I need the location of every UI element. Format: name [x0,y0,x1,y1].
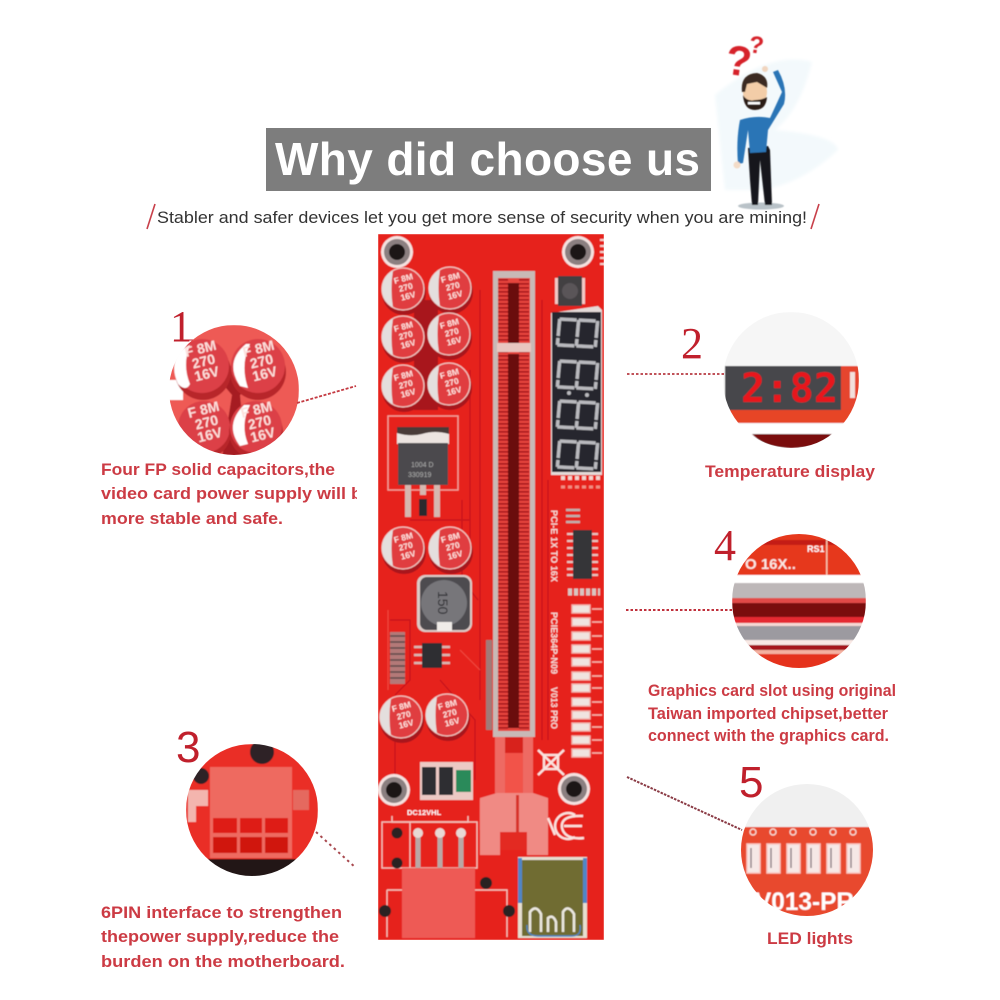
detail circle 1: F 8M [239,398,274,421]
capacitors: F 8M [439,316,460,331]
description 4 [648,682,896,745]
detail circle 4: RS1 [807,544,825,554]
description 3: 6PIN interface to strengthen [101,904,342,922]
capacitors [380,267,473,743]
number 4: 4 [714,521,736,570]
capacitors: 16V [399,386,417,400]
detail circle 2 [723,312,859,448]
capacitors: 270 [441,707,458,720]
detail circle 1: 270 [248,350,275,372]
detail circle 1: F 8M [186,398,221,421]
capacitors: F 8M [391,699,412,714]
illustration: confused man [723,31,785,210]
connector line 4 [626,609,733,611]
capacitors: 16V [399,548,417,562]
detail circle 2: 2:82 [741,366,838,412]
callout 5: LED lights [627,758,874,948]
detail circle 1: 270 [246,411,273,433]
14-pin chip [561,478,602,592]
description 4: Taiwan imported chipset,better [648,705,889,723]
capacitors: 16V [446,288,464,302]
callout 4: graphics card slot [626,521,896,745]
detail circle 5 [740,782,874,919]
capacitors: 16V [446,548,464,562]
silkscreen labels: PCIE364P-N09 [549,612,559,674]
description 1: Four FP solid capacitors,the [101,461,335,479]
title banner [266,128,711,191]
description 4: Graphics card slot using original [648,682,896,700]
product: red PCIe riser board [378,234,604,940]
question marks [723,31,765,86]
capacitors: 270 [397,378,414,391]
description 2: Temperature display [705,463,876,481]
connector line 1 [297,386,356,403]
MOSFET regulator: 1004 D [411,462,434,469]
mounting holes [378,236,594,806]
question marks: ? [723,36,755,86]
MOSFET regulator [388,416,458,517]
connector line 2 [627,373,724,375]
reset button [555,276,585,306]
number 1 [170,302,212,351]
capacitors: F 8M [393,319,414,334]
header vias [379,828,515,917]
description 3: burden on the motherboard. [101,953,345,971]
number 5: 5 [739,758,763,807]
detail circle 1: F 8M [183,337,218,360]
capacitors: 270 [443,376,460,389]
detail circle 1: 16V [251,363,279,384]
seven-segment display [551,306,602,475]
detail circle 1 [169,325,299,459]
detail circle 4: O 16X.. [745,556,796,573]
capacitors: 270 [397,540,414,553]
power header outline [382,816,507,937]
capacitors: 270 [397,329,414,342]
inductor [417,575,472,632]
capacitors: 270 [444,280,461,293]
detail circle 4 [732,533,866,670]
capacitors: 16V [443,715,461,729]
marks: recycle bin and CE [538,750,584,839]
callout 3: 6-pin interface [101,723,356,971]
detail circle 1: F 8M [241,337,276,360]
header label: DC12VHL [407,808,442,817]
connector line 3 [316,832,356,868]
capacitors: F 8M [393,530,414,545]
capacitors: F 8M [440,270,461,285]
capacitors: 270 [444,540,461,553]
capacitors: F 8M [393,271,414,286]
subtitle [147,204,819,229]
detail circle 1: 16V [193,363,221,384]
silkscreen labels: PCI-E 1X TO 16X [549,510,559,582]
subtitle: Stabler and safer devices let you get more sense of security when you are mining! [157,208,807,227]
capacitors: 16V [445,334,463,348]
description 1 [101,463,357,524]
description 3: thepower supply,reduce the [101,928,339,946]
callout 2: temperature display [627,312,876,481]
capacitors: 270 [397,281,414,294]
description 4: connect with the graphics card. [648,727,889,745]
detail circle 1: 270 [193,411,220,433]
detail circle 1: 270 [190,350,217,372]
PCIe x16 slot [486,271,535,737]
6-pin connector [402,828,475,938]
capacitors: 16V [397,717,415,731]
question marks: ? [747,31,765,60]
description 5: LED lights [767,930,853,948]
status LEDs [572,605,602,757]
description 1: more stable and safe. [101,510,283,528]
fuses [420,762,473,800]
detail circle 5: V013-PRO [755,888,873,916]
USB 3.0 port [518,857,587,938]
capacitors: F 8M [439,366,460,381]
slot retention latch [480,737,548,855]
capacitors: F 8M [393,368,414,383]
PCB traces [390,290,548,790]
description 3 [101,904,345,971]
capacitors: F 8M [440,530,461,545]
number 3: 3 [176,723,200,772]
heading text: Why did choose us [275,133,700,185]
number 2: 2 [681,319,703,368]
dark shading between capacitors [414,300,438,410]
capacitors: 270 [395,709,412,722]
8-pin chip and resistor pack [390,632,450,684]
silkscreen labels: V013 PRO [549,687,559,729]
detail circle 1: 16V [196,424,224,445]
capacitors: 16V [445,384,463,398]
description 1: video card power supply will b [101,485,362,503]
capacitors: 270 [443,326,460,339]
connector line 5 [627,777,742,830]
background swoosh behind the person [715,59,838,190]
MOSFET regulator: 330919 [408,472,431,479]
capacitors: 16V [399,337,417,351]
detail circle 3 [186,740,318,879]
number 1: 1 [170,302,192,351]
capacitors: F 8M [437,697,458,712]
callout 1: capacitors [101,302,362,528]
detail circle 1: 16V [249,424,277,445]
silkscreen labels [550,510,558,730]
inductor: 150 [435,591,451,615]
capacitors: 16V [399,289,417,303]
